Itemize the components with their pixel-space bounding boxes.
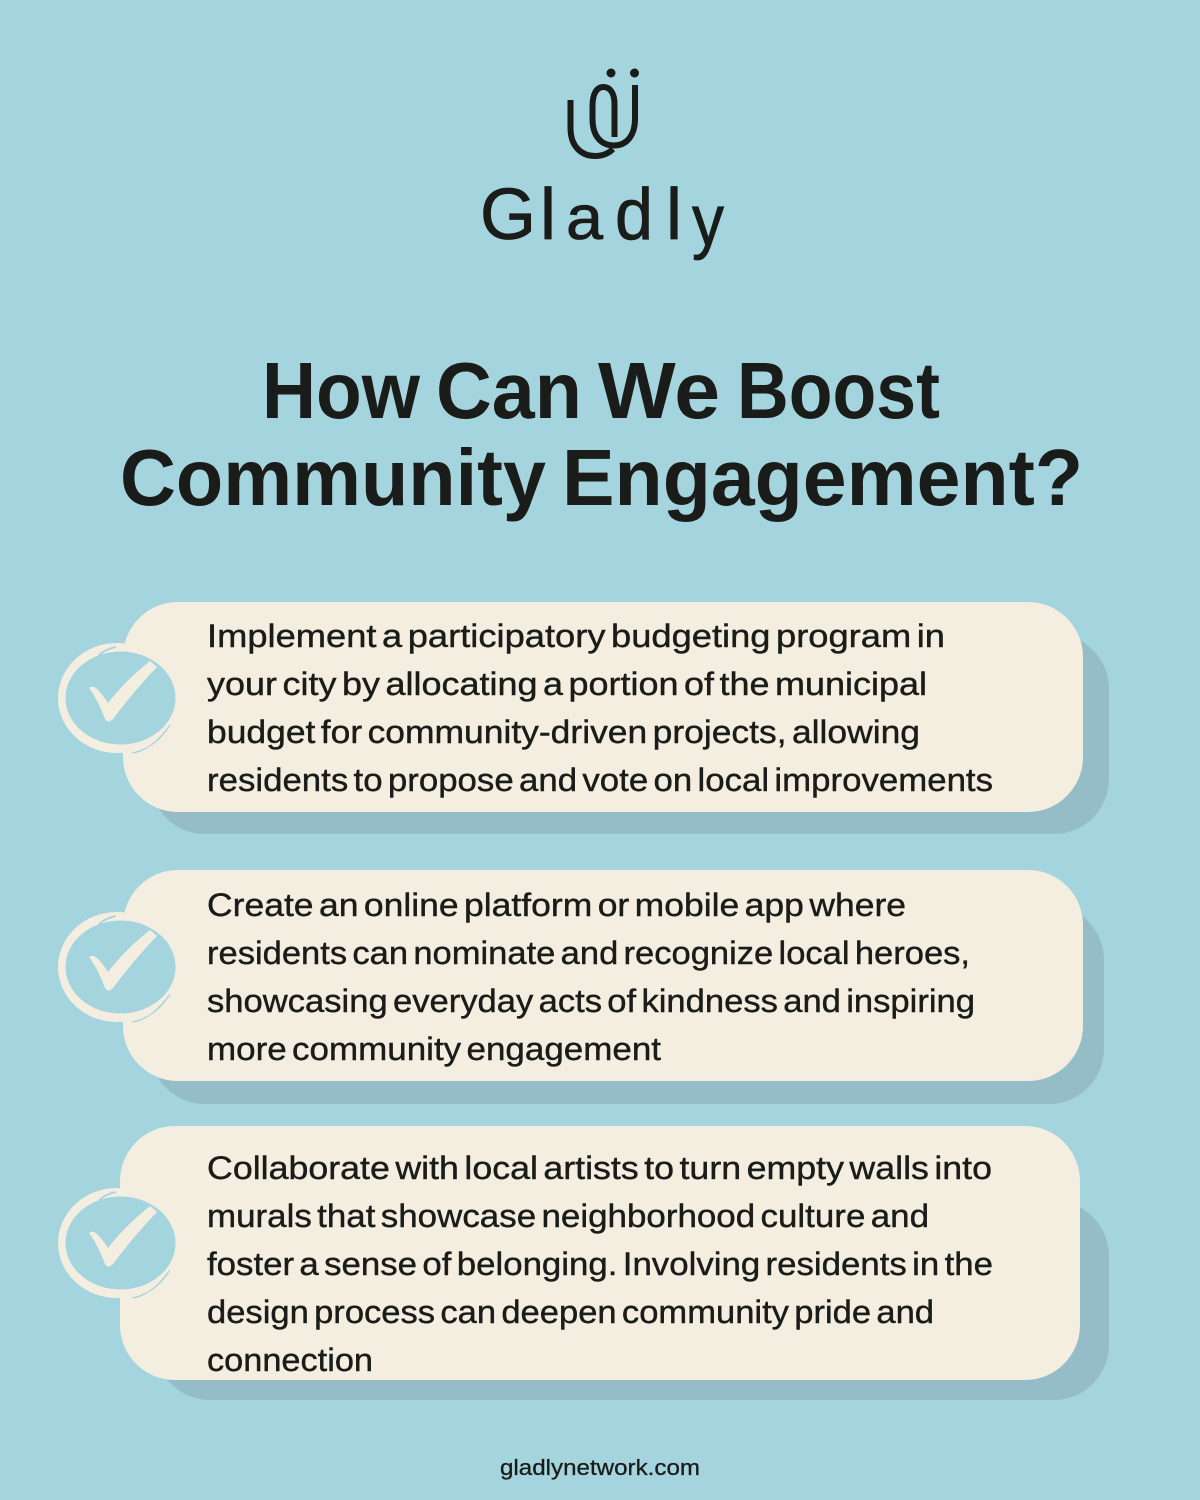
card [123, 602, 1083, 812]
text block: Collaborate with local artists to turn empty walls into [207, 1150, 992, 1186]
text block: Create an online platform or mobile app where [207, 887, 906, 923]
panel: tip 3 [58, 1126, 1109, 1400]
card [123, 870, 1083, 1081]
wordmark: l [666, 175, 682, 255]
title: Boost [737, 346, 940, 435]
card [120, 1126, 1080, 1380]
title: Can [436, 346, 582, 435]
icon: check circle [58, 912, 176, 1022]
text block: residents to propose and vote on local improvements [207, 762, 993, 798]
panel: tip 1 [58, 602, 1109, 834]
title: Engagement? [562, 433, 1083, 522]
text block: showcasing everyday acts of kindness and inspiring [207, 983, 975, 1019]
text block: residents can nominate and recognize local heroes, [207, 935, 970, 971]
wordmark: a [566, 184, 604, 253]
wordmark: G [480, 175, 536, 255]
text block: design process can deepen community pride and [207, 1294, 934, 1330]
title: How [262, 346, 421, 435]
card shadow [150, 905, 1104, 1104]
text block [207, 618, 993, 798]
panel: tip 2 [58, 870, 1104, 1104]
logo: Gladly [480, 68, 724, 261]
wordmark: y [692, 181, 724, 261]
text block: your city by allocating a portion of the municipal [207, 666, 927, 702]
text block: budget for community-driven projects, allowing [207, 714, 920, 750]
icon: paperclip smiley [570, 68, 639, 156]
text block [207, 887, 975, 1067]
text block [207, 1150, 993, 1378]
text block: murals that showcase neighborhood culture and [207, 1198, 929, 1234]
card shadow [155, 1201, 1109, 1400]
text block: foster a sense of belonging. Involving residents in the [207, 1246, 993, 1282]
text block: Implement a participatory budgeting program in [207, 618, 945, 654]
text block: more community engagement [207, 1031, 661, 1067]
text block: connection [207, 1342, 373, 1378]
card shadow [150, 634, 1109, 834]
icon: check circle [58, 1188, 176, 1298]
title: Community [120, 433, 546, 522]
title [120, 346, 1083, 522]
icon: check circle [58, 643, 176, 753]
footer url: gladlynetwork.com [500, 1455, 700, 1480]
wordmark: d [615, 175, 653, 255]
title: We [598, 346, 720, 435]
wordmark [480, 175, 724, 261]
wordmark: l [540, 175, 556, 255]
